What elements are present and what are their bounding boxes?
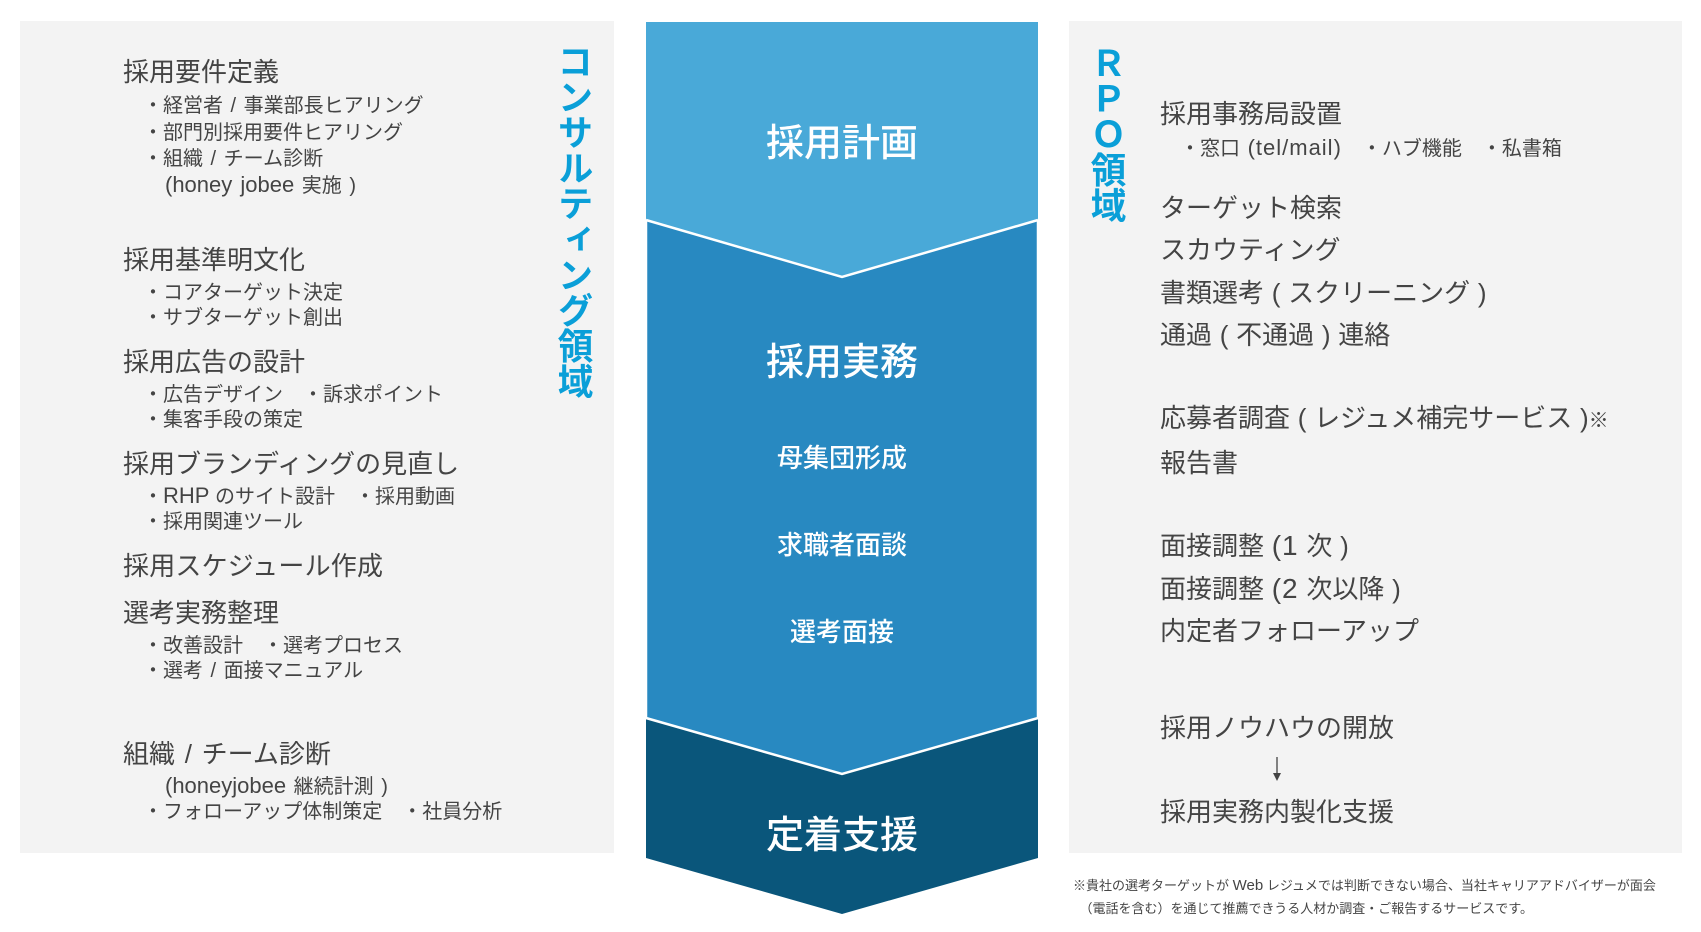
text block: ターゲット検索〜連絡: ターゲット検索 (1160, 193, 1342, 223)
list: 採用基準明文化 items: ・コアターゲット決定 (143, 282, 343, 304)
list: 選考実務整理 items: ・選考 / 面接マニュアル (143, 660, 363, 682)
footnote (1073, 877, 1656, 916)
chevron: 採用実務 (646, 210, 1038, 774)
list: 採用ブランディング items (143, 483, 455, 533)
panel: consulting area (20, 21, 614, 853)
text block: 応募者調査・報告書: 報告書 (1160, 448, 1238, 478)
list: 採用要件定義 items (143, 95, 424, 197)
label: 母集団形成: 母集団形成 (777, 443, 907, 473)
label: 採用計画: 採用計画 (766, 123, 918, 165)
vertical title: コンサルティング領域: コンサルティング領域 (553, 43, 593, 399)
text block: ターゲット検索〜連絡: 書類選考 ( スクリーニング ) (1160, 278, 1486, 308)
list: 採用要件定義 items: ・組織 / チーム診断 (143, 148, 323, 170)
list: 組織 / チーム診断 items (143, 773, 502, 823)
chevron: 採用計画 (646, 22, 1038, 277)
text block: 面接調整・内定者フォロー: 面接調整 (1 次 ) (1160, 530, 1349, 561)
heading: 選考実務整理: 選考実務整理 (123, 598, 279, 628)
list: 採用要件定義 items: ・経営者 / 事業部長ヒアリング (143, 95, 424, 117)
list: 採用ブランディング items: ・採用関連ツール (143, 511, 303, 533)
list: 採用基準明文化 items (143, 282, 343, 329)
text block: 面接調整・内定者フォロー (1160, 530, 1419, 646)
heading: 採用広告の設計: 採用広告の設計 (123, 347, 305, 377)
text block: ターゲット検索〜連絡: 通過 ( 不通過 ) 連絡 (1160, 320, 1390, 350)
chevron: 定着支援 (646, 710, 1038, 914)
list: 組織 / チーム診断 items: ・フォローアップ体制策定 ・社員分析 (143, 801, 502, 823)
list: 選考実務整理 items: ・改善設計 ・選考プロセス (143, 635, 403, 657)
text block: ターゲット検索〜連絡: スカウティング (1160, 235, 1340, 265)
label: 採用実務: 採用実務 (766, 342, 918, 384)
list: 採用要件定義 items: ・部門別採用要件ヒアリング (143, 122, 403, 144)
list: 採用広告の設計 items (143, 384, 443, 431)
heading: 採用事務局設置: 採用事務局設置 (1160, 99, 1342, 129)
list: 採用基準明文化 items: ・サブターゲット創出 (143, 307, 343, 329)
heading: 採用ノウハウの開放: 採用ノウハウの開放 (1160, 713, 1394, 743)
label: 定着支援: 定着支援 (766, 815, 918, 857)
heading: 組織 / チーム診断: 組織 / チーム診断 (123, 739, 331, 769)
text block: 面接調整・内定者フォロー: 面接調整 (2 次以降 ) (1160, 573, 1401, 604)
heading: 採用要件定義: 採用要件定義 (123, 57, 279, 87)
list: 選考実務整理 items (143, 635, 403, 682)
list: 採用要件定義 items: (honey jobee 実施 ) (165, 172, 356, 197)
panel: RPO area (1069, 21, 1682, 853)
text block: 応募者調査・報告書: 応募者調査 ( レジュメ補完サービス )※ (1160, 403, 1609, 433)
heading: 採用ブランディングの見直し: 採用ブランディングの見直し (123, 449, 459, 479)
vertical title: RPO領域: ＲＰＯ領域 (1086, 45, 1126, 223)
list: 採用広告の設計 items: ・集客手段の策定 (143, 409, 303, 431)
heading: 採用スケジュール作成: 採用スケジュール作成 (123, 551, 383, 581)
heading: 採用基準明文化: 採用基準明文化 (123, 245, 305, 275)
label: 求職者面談: 求職者面談 (777, 530, 907, 560)
list: 組織 / チーム診断 items: (honeyjobee 継続計測 ) (165, 773, 388, 798)
heading: 採用実務内製化支援: 採用実務内製化支援 (1160, 797, 1394, 827)
text block: 応募者調査・報告書 (1160, 403, 1609, 478)
footnote: ※貴社の選考ターゲットが Web レジュメでは判断できない場合、当社キャリアアドバイザーが面会 (1073, 877, 1656, 894)
icon: down arrow (1273, 757, 1281, 781)
list: 採用広告の設計 items: ・広告デザイン ・訴求ポイント (143, 384, 443, 406)
chevron divider (646, 220, 1038, 277)
list: 採用ブランディング items: ・RHP のサイト設計 ・採用動画 (143, 483, 455, 508)
text block: 面接調整・内定者フォロー: 内定者フォローアップ (1160, 616, 1419, 646)
footnote: （電話を含む）を通じて推薦できうる人材か調査・ご報告するサービスです。 (1086, 901, 1533, 916)
text block: ターゲット検索〜連絡 (1160, 193, 1486, 350)
list: 採用事務局 items: ・窓口 (tel/mail) ・ハブ機能 ・私書箱 (1180, 135, 1562, 160)
label: 選考面接: 選考面接 (790, 617, 894, 647)
